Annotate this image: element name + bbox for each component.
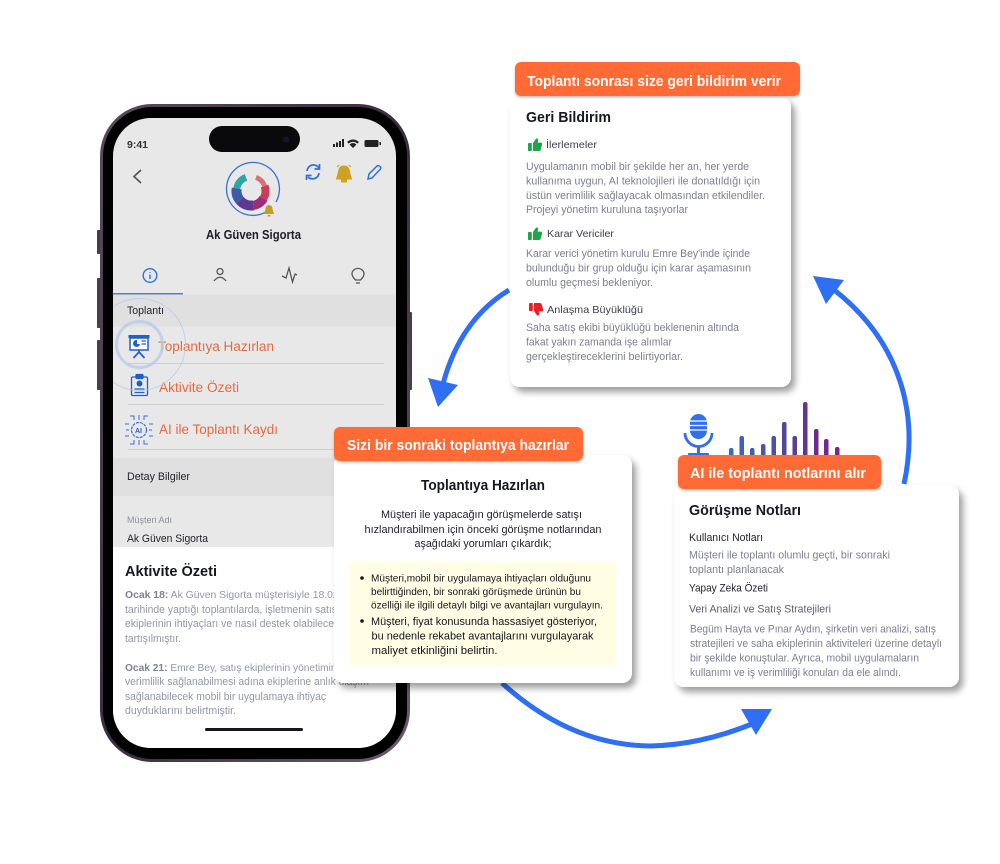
text: İlerlemeler: Projeyi yönetim kuruluna taşıyorlar xyxy=(526,204,688,216)
label: Anlaşma Büyüklüğü: Anlaşma Büyüklüğü xyxy=(547,304,643,316)
summary text xyxy=(125,590,369,717)
bullet list: maliyet etkinliğini belirtin. xyxy=(372,645,498,657)
icon: clipboard xyxy=(132,374,148,396)
home indicator xyxy=(205,728,303,731)
bullet list: belirttiğinden, bir sonraki görüşmede ürünün bu xyxy=(371,587,581,598)
pulse rings xyxy=(113,298,186,391)
sheet heading: Aktivite Özeti xyxy=(125,563,217,580)
notes heading: Görüşme Notları xyxy=(689,502,801,519)
prepare heading: Toplantıya Hazırlan xyxy=(421,477,545,494)
phone side buttons xyxy=(97,230,412,390)
field value: Ak Güven Sigorta xyxy=(127,533,209,545)
text: Karar Vericiler xyxy=(526,248,751,289)
arrow: bottom curve xyxy=(502,683,772,746)
back chevron xyxy=(134,170,141,183)
feedback card xyxy=(510,97,791,387)
field label: Müşteri Adı xyxy=(127,515,172,525)
icon: thumbs up xyxy=(528,138,542,151)
row: Aktivite Özeti: Aktivite Özeti xyxy=(159,378,239,395)
bullet list: Müşteri, fiyat konusunda hassasiyet gösteriyor, xyxy=(371,616,597,628)
text: AI summary: stratejileri ve saha ekiplerinin aktiviteleri üzerine detaylı xyxy=(690,638,942,650)
notes badge text: AI ile toplantı notlarını alır xyxy=(690,466,866,482)
panel: feedback xyxy=(510,62,800,387)
bullet list: Müşteri,mobil bir uygulamaya ihtiyaçları olduğunu xyxy=(371,574,591,584)
panel: activity summary sheet xyxy=(113,547,396,748)
company name: Ak Güven Sigorta xyxy=(206,228,302,242)
prepare intro xyxy=(364,509,602,550)
icon: AI chip: AI xyxy=(135,428,142,435)
text: Anlaşma Büyüklüğü: Saha satış ekibi büyüklüğü beklenenin altında xyxy=(526,322,740,334)
tab: person xyxy=(214,268,226,281)
panel: meeting notes xyxy=(674,402,959,687)
text: İlerlemeler: Uygulamanın mobil bir şekilde her an, her yerde xyxy=(526,161,749,173)
summary text: Ocak 18: Ak Güven Sigorta müşterisiyle 18.02.2024 xyxy=(125,590,365,601)
text: Anlaşma Büyüklüğü: fakat yakın zamanda işe alımlar xyxy=(526,336,672,348)
summary text: duyduklarını belirtmiştir. xyxy=(125,705,236,717)
icon: refresh xyxy=(306,164,320,180)
bullet list xyxy=(360,574,603,657)
active tab underline xyxy=(113,293,183,294)
icon: presentation xyxy=(128,335,150,358)
dynamic island xyxy=(209,126,300,152)
panel: prepare for meeting xyxy=(334,427,632,683)
prepare badge text: Sizi bir sonraki toplantıya hazırlar xyxy=(347,438,569,454)
text: AI summary: bir şekilde konuştular. Ayrıca, mobil uygulamaların xyxy=(690,652,919,664)
icon: thumbs up xyxy=(528,227,542,240)
text: Anlaşma Büyüklüğü: gerçekleştireceklerini belirtiyorlar. xyxy=(526,351,683,363)
text: AI summary: Begüm Hayta ve Pınar Aydın, şirketin veri analizi, satış xyxy=(690,624,936,636)
prepare card xyxy=(334,455,632,683)
summary text: verimlilik sağlanabilmesi adına ekiplerine anlık ulaşım xyxy=(125,676,369,688)
text: AI summary: kullanımı ve iş verimliliği konuları da ele alındı. xyxy=(690,667,901,679)
phone body xyxy=(100,104,410,762)
phone mockup xyxy=(94,104,412,762)
prepare intro: hızlandırabilmen için önceki görüşme notlarından xyxy=(364,524,602,536)
summary text: tarihinde yaptığı toplantılarda, işletmenin satış xyxy=(125,604,337,616)
icon: AI chip xyxy=(125,415,153,445)
status icons xyxy=(333,139,381,148)
section label: Toplantı: Toplantı xyxy=(127,305,164,317)
text: İlerlemeler: kullanıma uygun, AI teknolojileri ile donatıldığı için xyxy=(526,176,760,188)
camera xyxy=(283,136,289,142)
text: AI summary xyxy=(690,624,942,679)
prepare intro: Müşteri ile yapacağın görüşmelerde satışı xyxy=(381,509,582,521)
notes badge xyxy=(678,455,881,489)
summary text: ekiplerinin ihtiyaçları ve nasıl destek olabilecekleri xyxy=(125,618,353,630)
tab: activity xyxy=(282,268,297,282)
label: İlerlemeler: İlerlemeler xyxy=(546,138,598,151)
section label: Detay Bilgiler: Detay Bilgiler xyxy=(127,471,190,483)
row: Toplantıya Hazırlan: Toplantıya Hazırlan xyxy=(158,338,274,354)
tab: info xyxy=(143,269,157,282)
notification bell small xyxy=(264,205,274,216)
company logo xyxy=(226,162,279,215)
prepare badge xyxy=(334,427,583,461)
icon: microphone xyxy=(685,414,712,456)
section band: Toplantı xyxy=(113,294,396,326)
label: Yapay Zeka Özeti: Yapay Zeka Özeti xyxy=(689,582,768,594)
icon: pencil xyxy=(368,166,381,179)
summary text: sağlanabilecek mobil bir uygulamaya ihtiyaç xyxy=(125,691,326,703)
bullet list: bu nedenle rekabet avantajlarını vurgulayarak xyxy=(372,630,594,642)
arrow: left curve xyxy=(428,290,509,407)
audio waveform xyxy=(729,402,840,458)
arrow: right curve xyxy=(813,276,909,484)
feedback heading: Geri Bildirim xyxy=(526,109,611,126)
text: Anlaşma Büyüklüğü xyxy=(526,322,740,363)
text: İlerlemeler: üstün verimlilik sağlayacak olmasından etkilendiler. xyxy=(526,190,765,202)
row: AI ile Toplantı Kaydı: AI ile Toplantı Kaydı xyxy=(159,421,278,437)
feedback badge text: Toplantı sonrası size geri bildirim verir xyxy=(527,74,781,90)
phone screen xyxy=(94,118,396,748)
label: Karar Vericiler: Karar Vericiler xyxy=(547,228,614,240)
text: Karar Vericiler: Karar verici yönetim kurulu Emre Bey'inde içinde xyxy=(526,248,750,260)
text: user notes xyxy=(689,550,890,576)
feedback badge xyxy=(515,62,800,96)
summary text: Ocak 21: Emre Bey, satış ekiplerinin yönetimine xyxy=(125,663,343,674)
prepare intro: aşağıdaki yorumları çıkardık; xyxy=(414,538,552,550)
text: Karar Vericiler: bulunduğu bir grup olduğu için karar aşamasının xyxy=(526,262,751,274)
text: user notes: toplantı planlanacak xyxy=(689,564,784,576)
text: İlerlemeler xyxy=(526,161,765,216)
tab: bulb xyxy=(352,268,364,283)
bullet list: özelliği ile ilgili detaylı bilgi ve avantajları vurgulayın. xyxy=(371,600,603,612)
status time: 9:41 xyxy=(127,139,148,151)
text: user notes: Müşteri ile toplantı olumlu geçti, bir sonraki xyxy=(689,550,890,562)
highlight box xyxy=(350,562,616,665)
icon: thumbs down xyxy=(529,303,543,316)
text: Karar Vericiler: olumlu geçmesi bekleniyor. xyxy=(526,277,653,289)
summary text: tartışılmıştır. xyxy=(125,633,181,645)
subheading: Veri Analizi ve Satış Stratejileri xyxy=(689,604,831,616)
label: Kullanıcı Notları: Kullanıcı Notları xyxy=(689,532,763,544)
section band: Detay Bilgiler xyxy=(113,458,396,496)
notes card xyxy=(674,485,959,687)
icon: bell xyxy=(336,165,352,182)
